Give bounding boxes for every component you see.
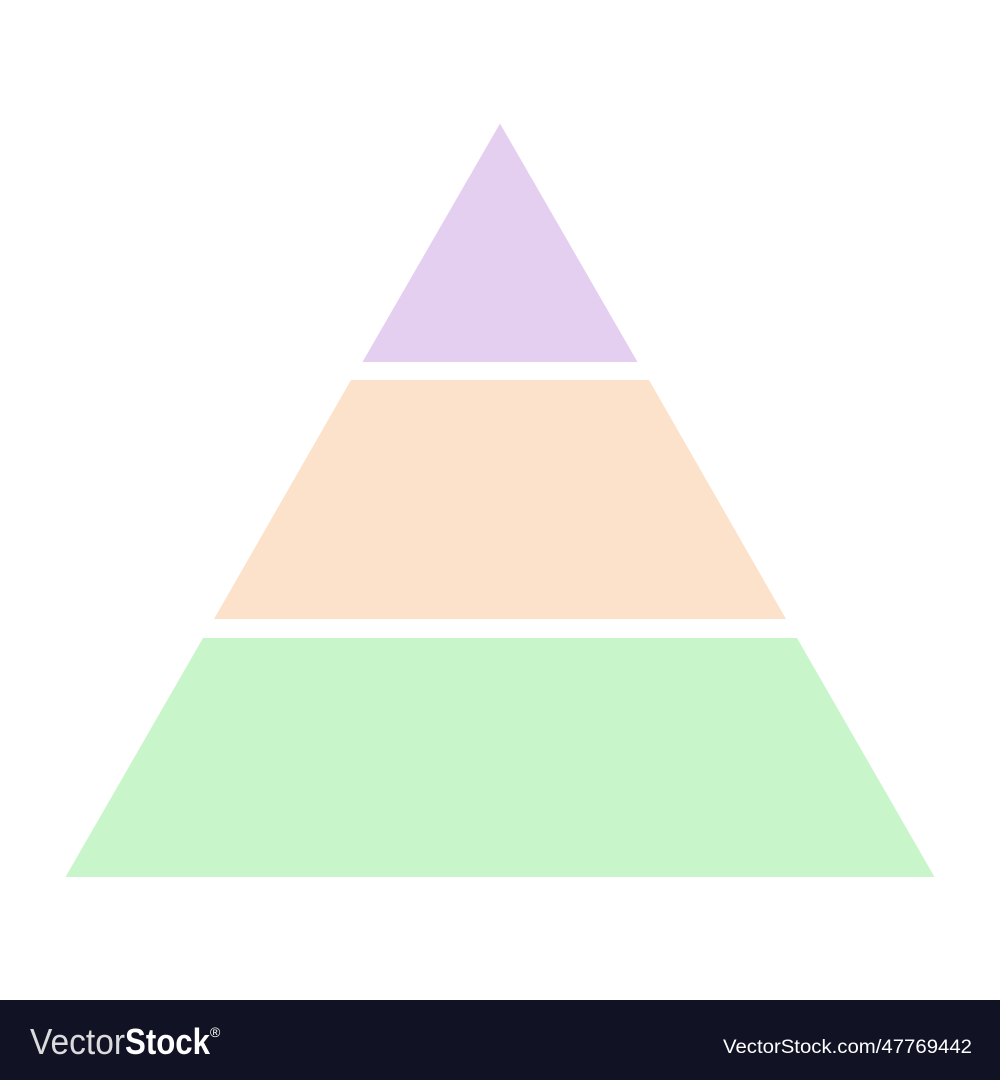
pyramid bottom tier: green trapezoid [66,638,934,877]
footer logo: VectorStock [30,1021,221,1062]
footer bar [0,1000,1000,1080]
footer logo: VectorStock: Vector [30,1021,125,1062]
footer logo: VectorStock: ® [210,1024,221,1040]
footer logo: VectorStock: Stock [125,1021,211,1062]
pyramid middle tier: peach trapezoid [214,380,786,619]
footer image id: VectorStock.com/47769442 [723,1037,972,1058]
pyramid top tier: purple triangle [362,124,638,362]
